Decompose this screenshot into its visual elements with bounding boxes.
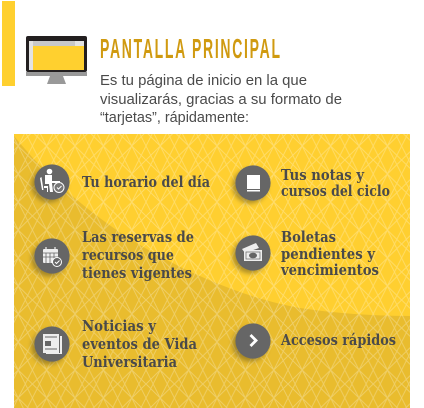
item: noticias: Universitaria [82, 353, 177, 371]
item: reservas: Las reservas de [82, 228, 194, 246]
accent bar [2, 1, 15, 86]
item: notas: cursos del ciclo [281, 182, 390, 200]
item: noticias [32, 317, 197, 371]
item: boletas: Boletas [281, 228, 336, 246]
item: boletas: pendientes y [281, 245, 376, 263]
item: horario [32, 164, 210, 202]
intro text: visualizarás, gracias a su formato de [100, 92, 342, 108]
intro text [100, 73, 342, 126]
item: reservas [32, 228, 194, 282]
item: accesos: Accesos rápidos [280, 331, 396, 349]
item: notas [232, 165, 390, 204]
item: notas: Tus notas y [281, 166, 365, 184]
item: reservas: tienes vigentes [82, 264, 192, 282]
item: noticias: Noticias y [82, 317, 157, 335]
icon: monitor [26, 36, 87, 84]
item: accesos [232, 323, 396, 362]
panel: features [14, 134, 410, 408]
intro text: Es tu página de inicio en la que [100, 73, 307, 89]
item: horario: Tu horario del día [82, 173, 210, 191]
item: boletas: vencimientos [280, 261, 379, 279]
item: boletas [232, 228, 379, 279]
item: noticias: eventos de Vida [82, 335, 197, 353]
intro text: “tarjetas”, rápidamente: [100, 110, 249, 126]
title: PANTALLA PRINCIPAL [100, 33, 280, 64]
item: reservas: recursos que [82, 246, 174, 264]
